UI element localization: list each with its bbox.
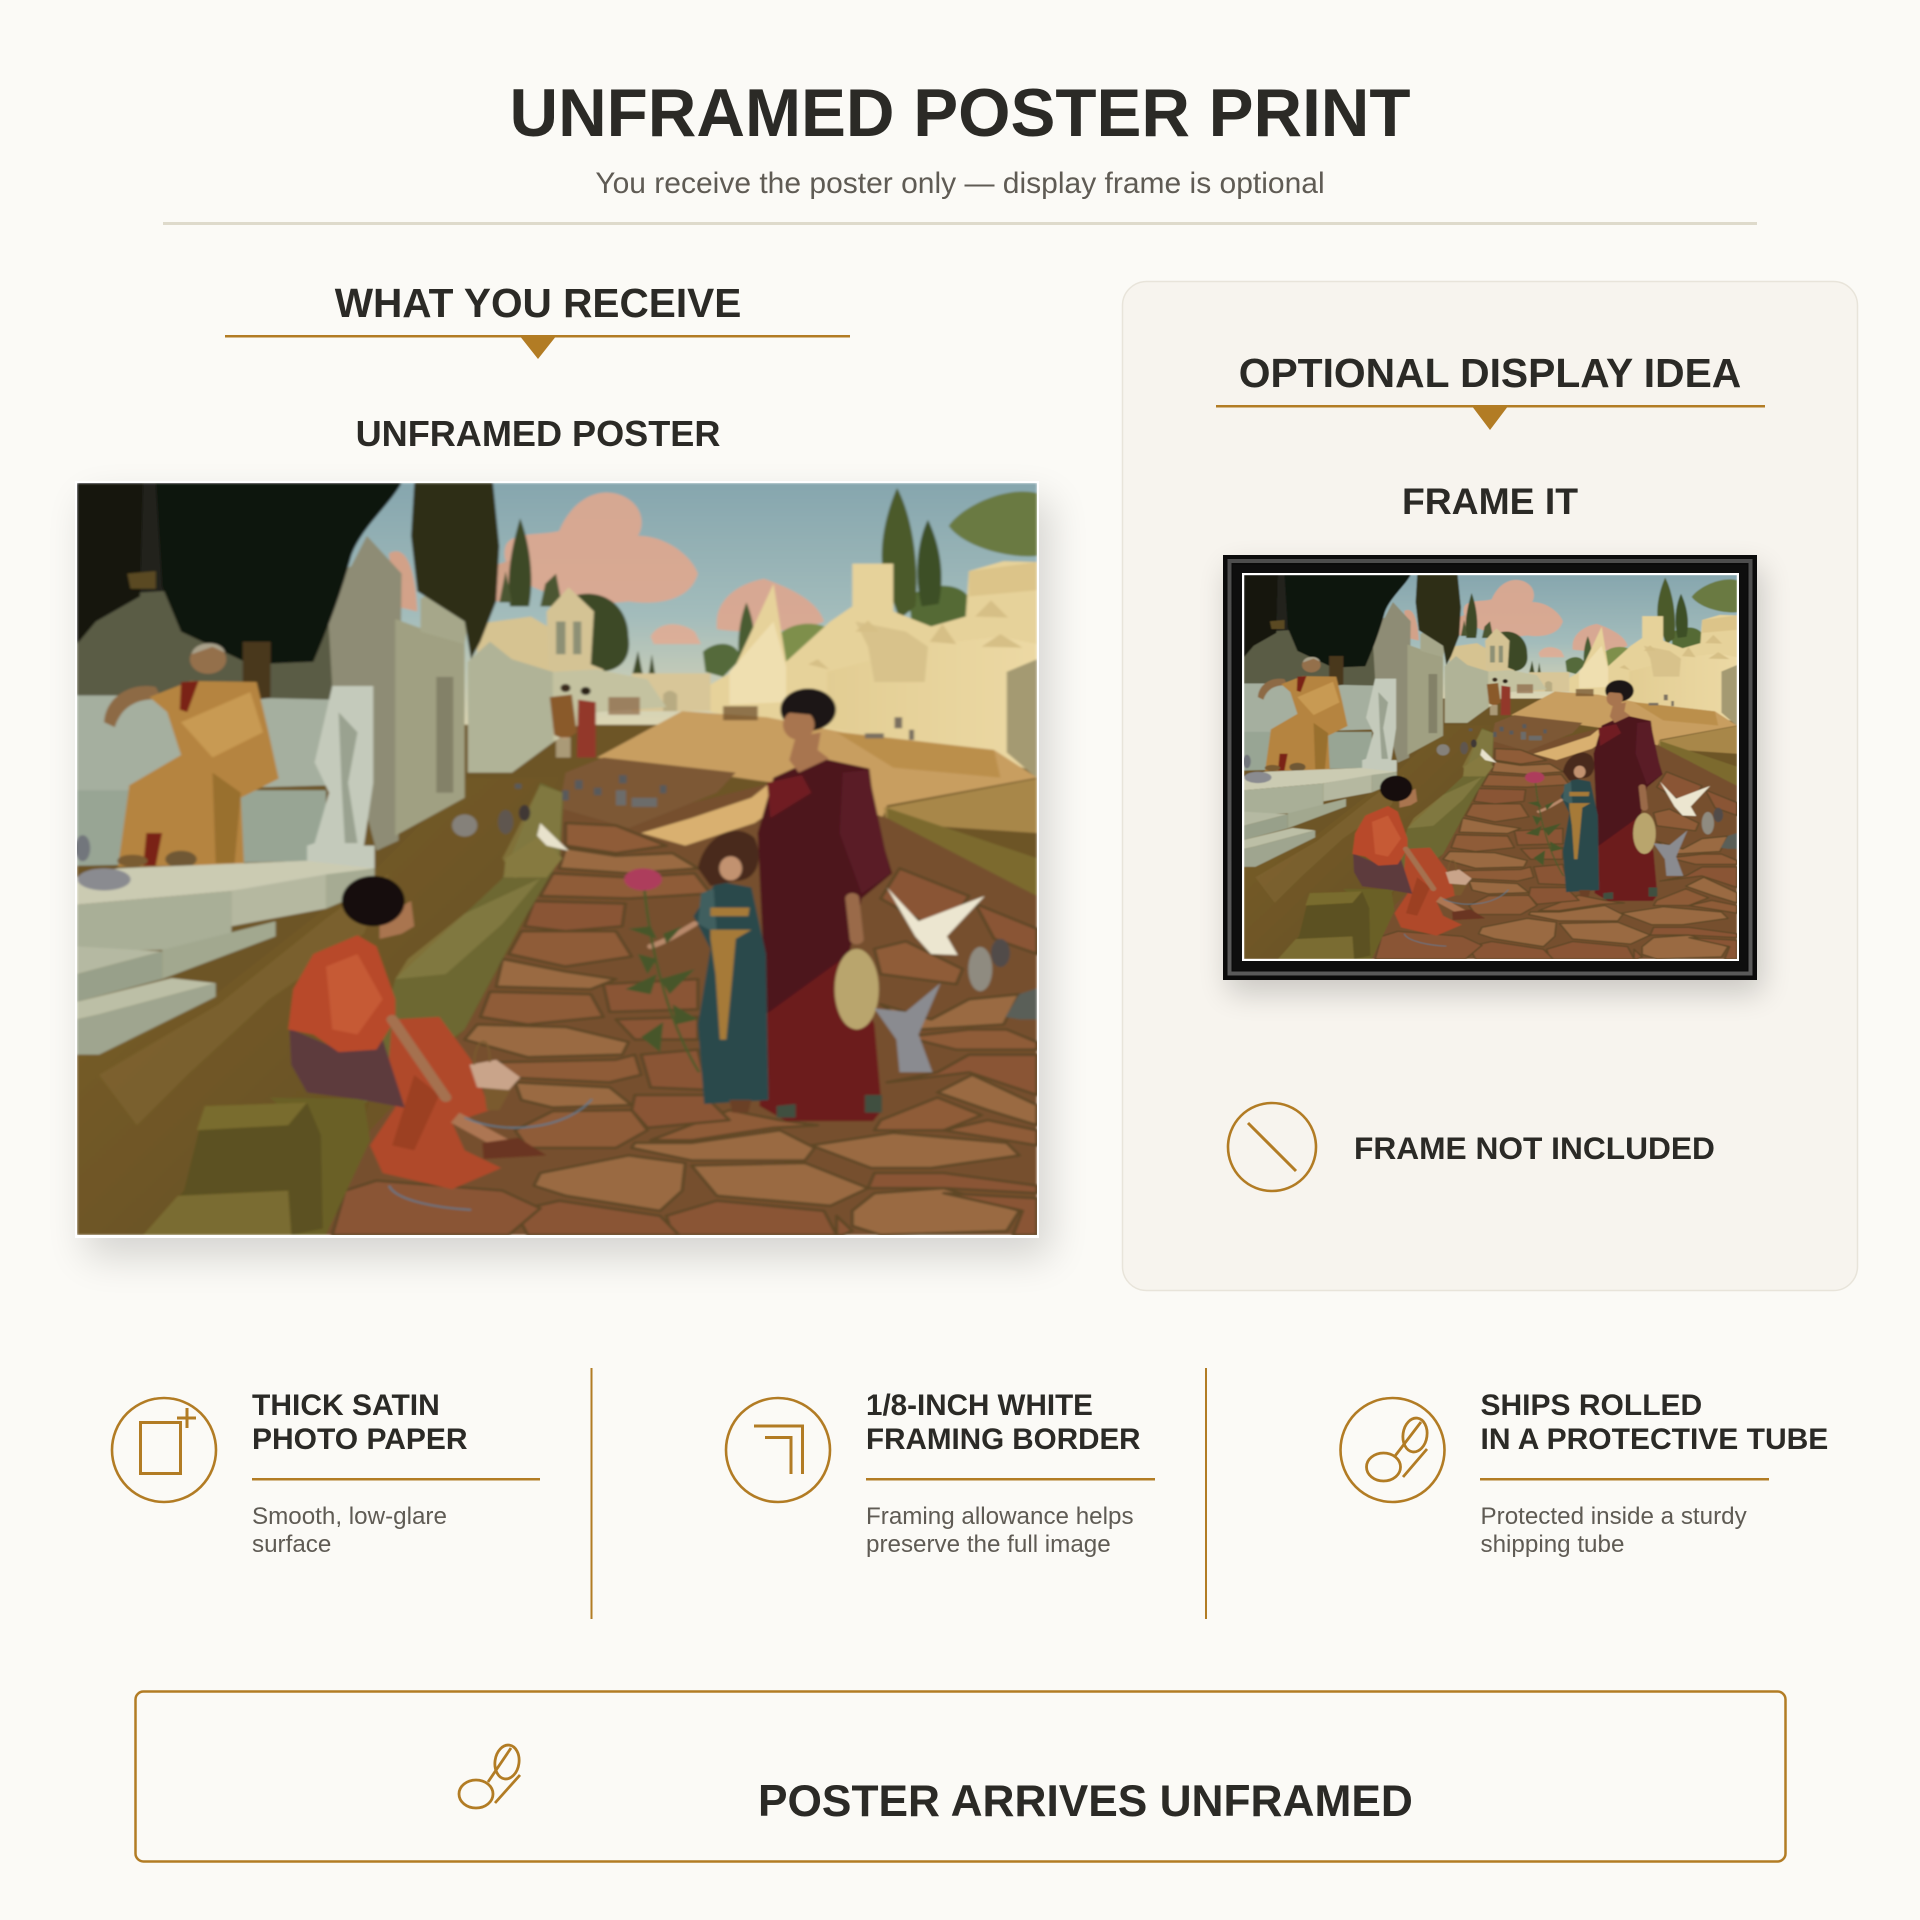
unframed poster print: [75, 481, 1050, 1257]
panel: optional display idea: [1122, 282, 1858, 1290]
heading rule with arrow: [225, 335, 850, 359]
subtitle: You receive the poster only — display frame is optional: [595, 167, 1325, 200]
heading: optional display idea: OPTIONAL DISPLAY IDEA: [1239, 350, 1741, 396]
feature heading: FRAMING BORDER: [866, 1423, 1141, 1456]
title: UNFRAMED POSTER PRINT: [509, 76, 1411, 151]
feature heading: SHIPS ROLLED: [1480, 1389, 1702, 1422]
feature: thick satin photo paper: [112, 1389, 540, 1558]
icon: paper sheet: [112, 1398, 216, 1502]
label: frame not included: FRAME NOT INCLUDED: [1354, 1130, 1715, 1166]
feature heading: IN A PROTECTIVE TUBE: [1480, 1423, 1828, 1456]
icon: rolled tube: [1340, 1398, 1444, 1502]
feature description: surface: [252, 1531, 331, 1558]
label: frame it: FRAME IT: [1402, 480, 1578, 522]
feature description: Smooth, low-glare: [252, 1503, 447, 1530]
framed poster mockup: [1223, 555, 1762, 993]
feature heading: 1/8-INCH WHITE: [866, 1389, 1093, 1422]
heading rule with arrow: [1216, 405, 1765, 430]
feature: framing border: [726, 1389, 1155, 1558]
banner text: POSTER ARRIVES UNFRAMED: [758, 1777, 1413, 1826]
feature heading: PHOTO PAPER: [252, 1423, 468, 1456]
heading: what you receive: WHAT YOU RECEIVE: [335, 280, 741, 326]
feature description: shipping tube: [1480, 1531, 1624, 1558]
feature description: preserve the full image: [866, 1531, 1111, 1558]
banner: poster arrives unframed: [136, 1692, 1786, 1862]
feature heading: THICK SATIN: [252, 1389, 440, 1422]
feature description: Framing allowance helps: [866, 1503, 1134, 1530]
icon: frame not included: [1228, 1103, 1316, 1191]
icon: rolled tube: [459, 1743, 521, 1808]
icon: corner brackets: [726, 1398, 830, 1502]
section: what you receive: [75, 280, 1050, 1257]
feature description: Protected inside a sturdy: [1480, 1503, 1748, 1530]
label: unframed poster: UNFRAMED POSTER: [356, 413, 720, 454]
feature: ships rolled: [1340, 1389, 1828, 1558]
